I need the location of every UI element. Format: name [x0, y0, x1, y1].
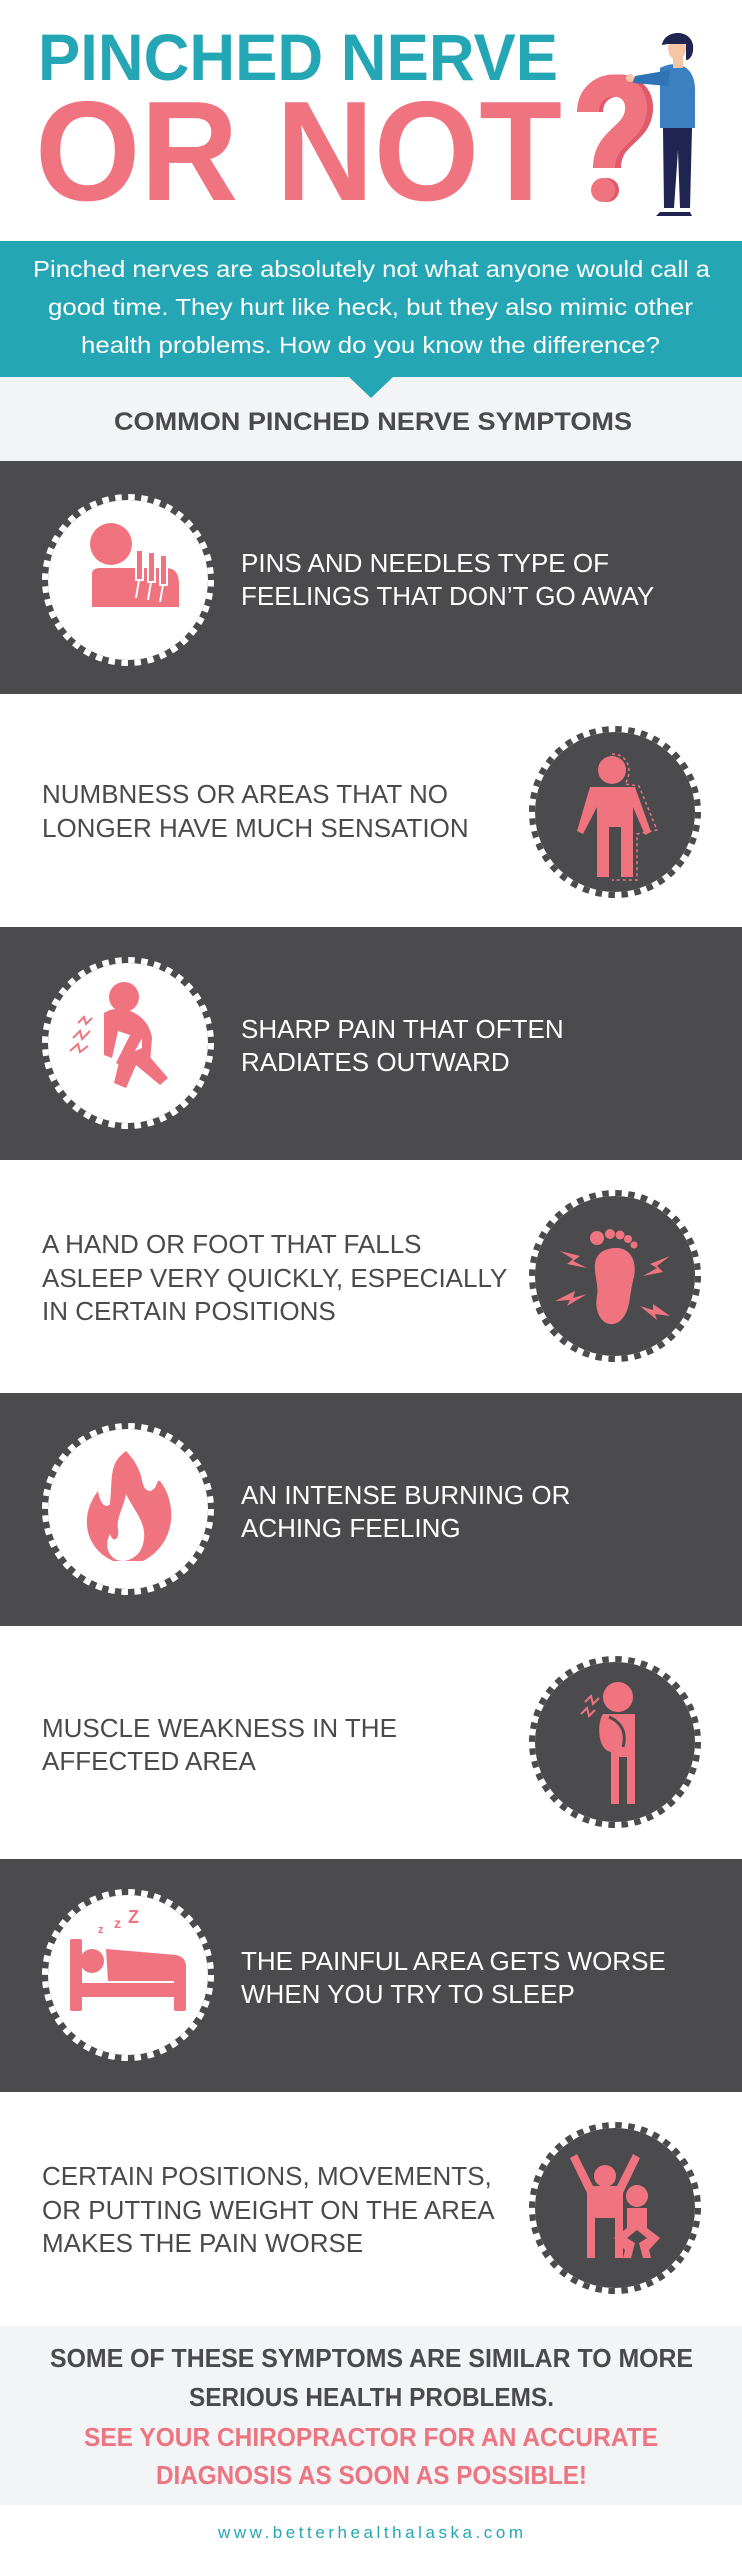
panel: hand or foot asleep [0, 1160, 742, 1393]
panel: muscle weakness: AFFECTED AREA [42, 1746, 256, 1776]
icon: bed: z [114, 1915, 121, 1931]
intro band: Pinched nerves are absolutely not what anyone would call a [33, 256, 710, 282]
panel: muscle weakness [0, 1626, 742, 1859]
panel: burning: AN INTENSE BURNING OR [241, 1480, 570, 1510]
panel: sleep: THE PAINFUL AREA GETS WORSE [241, 1946, 666, 1976]
icon: person standing [626, 33, 695, 216]
title: PINCHED NERVE [38, 20, 558, 94]
icon: pins and needles [90, 523, 179, 607]
icon: bed: z [98, 1924, 104, 1936]
panel: positions and movements: CERTAIN POSITIONS, MOVEMENTS, [42, 2161, 492, 2191]
icon: flame [87, 1451, 171, 1561]
panel: burning [0, 1393, 742, 1626]
icon: question mark [588, 85, 642, 202]
panel: numbness: LONGER HAVE MUCH SENSATION [42, 813, 469, 843]
panel: muscle weakness: MUSCLE WEAKNESS IN THE [42, 1713, 397, 1743]
panel: pins and needles [0, 461, 742, 694]
panel: hand or foot asleep: IN CERTAIN POSITIONS [42, 1296, 336, 1326]
callout: see your chiropractor: DIAGNOSIS AS SOON AS POSSIBLE! [156, 2460, 587, 2490]
heading: common symptoms: COMMON PINCHED NERVE SYMPTOMS [114, 408, 632, 436]
panel: sharp pain: SHARP PAIN THAT OFTEN [241, 1014, 564, 1044]
panel: pins and needles: PINS AND NEEDLES TYPE OF [241, 548, 609, 578]
callout: see your chiropractor [0, 2326, 742, 2505]
intro band: health problems. How do you know the difference? [81, 332, 660, 358]
panel: hand or foot asleep: ASLEEP VERY QUICKLY, ESPECIALLY [42, 1263, 507, 1293]
panel: hand or foot asleep: A HAND OR FOOT THAT FALLS [42, 1229, 422, 1259]
footer url: www.betterhealthalaska.com [217, 2523, 523, 2542]
panel: sharp pain: RADIATES OUTWARD [241, 1047, 510, 1077]
panel: pins and needles: FEELINGS THAT DON’T GO AWAY [241, 581, 654, 611]
icon: hunched figure [70, 982, 168, 1088]
panel: positions and movements [0, 2092, 742, 2326]
callout: see your chiropractor: SERIOUS HEALTH PROBLEMS. [189, 2382, 554, 2412]
panel: numbness [0, 694, 742, 927]
panel: numbness: NUMBNESS OR AREAS THAT NO [42, 779, 448, 809]
icon: foot [555, 1229, 670, 1324]
panel: positions and movements: OR PUTTING WEIGHT ON THE AREA [42, 2195, 495, 2225]
icon: person holding arm [581, 1682, 635, 1804]
panel: sharp pain [0, 927, 742, 1160]
title: OR NOT [35, 72, 562, 231]
panel: positions and movements: MAKES THE PAIN WORSE [42, 2228, 363, 2258]
icon: bed: Z [128, 1907, 139, 1927]
panel: sleep [0, 1859, 742, 2092]
panel: burning: ACHING FEELING [241, 1513, 461, 1543]
callout: see your chiropractor: SEE YOUR CHIROPRACTOR FOR AN ACCURATE [84, 2422, 658, 2452]
intro band [0, 241, 742, 461]
callout: see your chiropractor: SOME OF THESE SYMPTOMS ARE SIMILAR TO MORE [50, 2343, 693, 2373]
intro band: good time. They hurt like heck, but they also mimic other [48, 294, 693, 320]
panel: sleep: WHEN YOU TRY TO SLEEP [241, 1979, 575, 2009]
icon: bed [70, 1907, 186, 2011]
icon: two figures [570, 2154, 660, 2258]
icon: numb figure [577, 754, 657, 880]
